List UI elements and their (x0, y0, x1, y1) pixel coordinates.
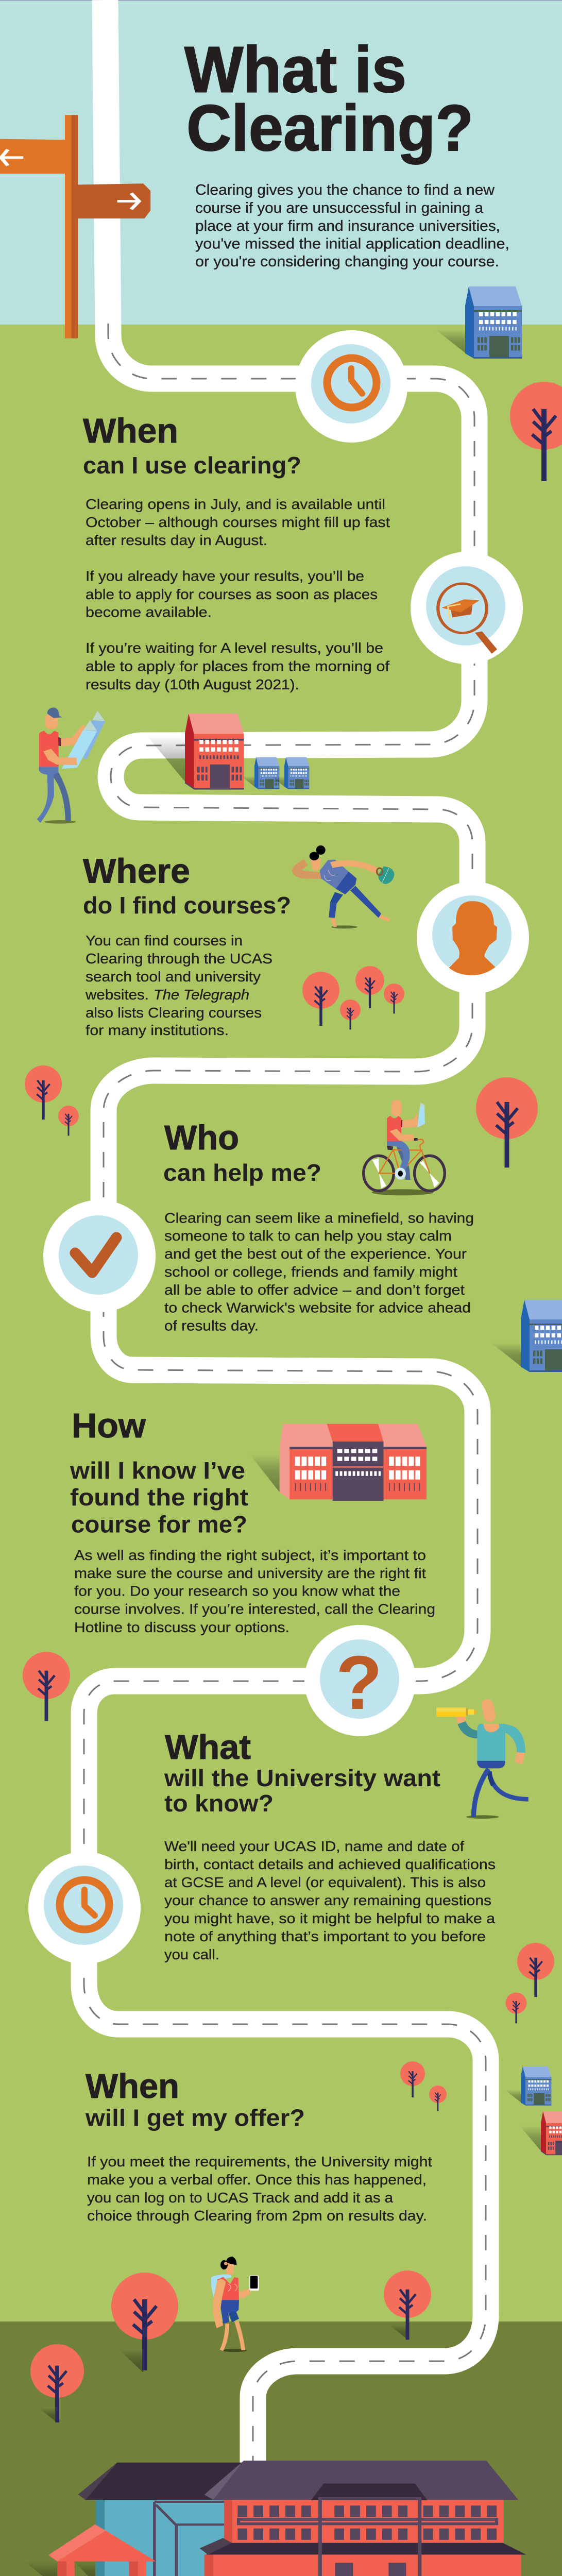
body text: We'll need your UCAS ID, name and date of (164, 1838, 464, 1854)
building: blue, right edge (491, 1300, 562, 1372)
body text: all be able to offer advice – and don’t forget (164, 1282, 465, 1298)
body text: of results day. (164, 1318, 259, 1333)
body text: and get the best out of the experience. Your (164, 1246, 467, 1262)
panel: who can help me (163, 1118, 474, 1333)
heading: will I get my offer? (85, 2104, 305, 2131)
heading (163, 1118, 321, 1186)
building: wide red (249, 1424, 427, 1501)
heading: to know? (164, 1790, 274, 1817)
heading: found the right (70, 1484, 248, 1511)
body text: make you a verbal offer. Once this has happened, (87, 2172, 427, 2188)
panel: what will the university want to know (164, 1728, 496, 1962)
body text: for many institutions. (86, 1022, 229, 1038)
heading: can I use clearing? (83, 452, 301, 479)
body text: at GCSE and A level (or equivalent). This is also (164, 1874, 486, 1890)
icon: magnifier with graduation cap (411, 552, 523, 664)
trees group: mid (302, 966, 404, 1029)
body text: to check Warwick's website for advice ahead (164, 1299, 471, 1316)
body text: for you. Do your research so you know what the (74, 1583, 400, 1599)
title (184, 33, 473, 164)
person walking with bag (292, 845, 395, 928)
body text: Hotline to discuss your options. (74, 1619, 289, 1635)
body text: You can find courses in (86, 933, 243, 948)
intro text (195, 182, 509, 270)
panel: when will I get my offer (85, 2067, 432, 2224)
body text (86, 496, 390, 692)
intro text: place at your firm and insurance universities, (195, 218, 500, 234)
heading (70, 1406, 248, 1537)
intro text: Clearing gives you the chance to find a new (195, 182, 495, 198)
heading: When (83, 412, 178, 450)
body text: school or college, friends and family might (164, 1264, 457, 1280)
heading (83, 852, 291, 919)
winding road (84, 0, 486, 2468)
body text (87, 2154, 432, 2224)
body text: If you’re waiting for A level results, you’ll be (86, 640, 383, 656)
heading (83, 412, 301, 479)
trees group: right edge (506, 1943, 554, 2023)
body text: websites. (85, 987, 149, 1003)
heading: course for me? (71, 1511, 247, 1537)
tree (510, 382, 562, 481)
heading (164, 1728, 440, 1817)
body text (85, 933, 273, 1038)
heading: Who (164, 1118, 239, 1157)
body text: Clearing can seem like a minefield, so having (164, 1210, 474, 1226)
heading: do I find courses? (83, 892, 291, 919)
intro text: course if you are unsuccessful in gaining a (195, 200, 484, 216)
body text: become available. (86, 604, 212, 620)
body text: birth, contact details and achieved qualifications (164, 1856, 496, 1872)
background: grass (0, 325, 562, 2322)
body text: able to apply for places from the morning of (86, 658, 389, 674)
person on bicycle (364, 1100, 445, 1195)
icon: clock (28, 1852, 141, 1964)
body text: If you already have your results, you’ll be (86, 568, 364, 584)
body text: your chance to answer any remaining questions (164, 1892, 491, 1908)
body text: you can log on to UCAS Track and add it as a (87, 2190, 393, 2206)
person with telescope (436, 1699, 529, 1819)
tree (23, 1652, 70, 1721)
person with phone (211, 2257, 259, 2352)
person with map (37, 707, 105, 824)
panel: where do I find courses (83, 852, 291, 1038)
icon: clock (295, 330, 407, 443)
body text: you might have, so it might be helpful to make a (164, 1910, 495, 1926)
intro text: or you're considering changing your course. (195, 253, 499, 270)
body text: course involves. If you’re interested, call the Clearing (74, 1601, 435, 1617)
trees group: ground (30, 2270, 431, 2422)
intro text: you've missed the initial application deadline, (195, 236, 509, 252)
icon: question mark (304, 1625, 416, 1736)
body text: after results day in August. (86, 532, 267, 548)
title: Clearing? (186, 92, 473, 164)
heading: can help me? (163, 1159, 321, 1186)
heading: will the University want (164, 1765, 440, 1791)
body text: October – although courses might fill up fast (86, 514, 390, 530)
body text: also lists Clearing courses (86, 1005, 262, 1021)
panel: when can I use clearing (83, 412, 390, 692)
body text: The Telegraph (154, 987, 249, 1003)
body text (164, 1838, 496, 1962)
body text (164, 1210, 474, 1333)
building: small blue, right (505, 2066, 551, 2106)
heading: How (72, 1406, 146, 1445)
icon: head silhouette (417, 882, 529, 994)
body text: results day (10th August 2021). (86, 676, 299, 692)
icon: tick (43, 1200, 156, 1312)
heading (85, 2067, 305, 2131)
buildings: two small blue (241, 757, 309, 789)
body text: note of anything that’s important to you before (164, 1928, 486, 1944)
background: dark grass (0, 2321, 562, 2576)
heading: Where (83, 852, 190, 890)
body text: Clearing through the UCAS (86, 951, 273, 967)
heading: When (86, 2067, 179, 2106)
signpost (0, 115, 150, 338)
building: blue, top (435, 286, 522, 359)
body text (74, 1547, 435, 1635)
trees group: beside road (400, 2061, 447, 2111)
heading: will I know I’ve (70, 1457, 245, 1484)
body text: Clearing opens in July, and is available until (86, 496, 385, 512)
panel: how will I know (70, 1406, 435, 1635)
building: red, road bend (147, 714, 244, 790)
body text: you call. (164, 1946, 219, 1962)
icon: question mark: ? (336, 1640, 382, 1725)
title: What is (184, 33, 406, 106)
body text: If you meet the requirements, the University might (87, 2154, 432, 2170)
trees group: left (25, 1065, 79, 1136)
heading: What (165, 1728, 251, 1767)
body text: someone to talk to can help you stay calm (164, 1228, 452, 1244)
body text: make sure the course and university are the right fit (74, 1565, 426, 1581)
building: small red, right (520, 2111, 562, 2155)
body text: choice through Clearing from 2pm on results day. (87, 2208, 427, 2224)
body text: search tool and university (86, 969, 261, 985)
tree: large right (476, 1077, 538, 1167)
body text: able to apply for courses as soon as places (86, 586, 378, 602)
body text: As well as finding the right subject, it’s important to (74, 1547, 426, 1563)
background: sky (0, 0, 562, 325)
campus building (24, 2461, 526, 2576)
